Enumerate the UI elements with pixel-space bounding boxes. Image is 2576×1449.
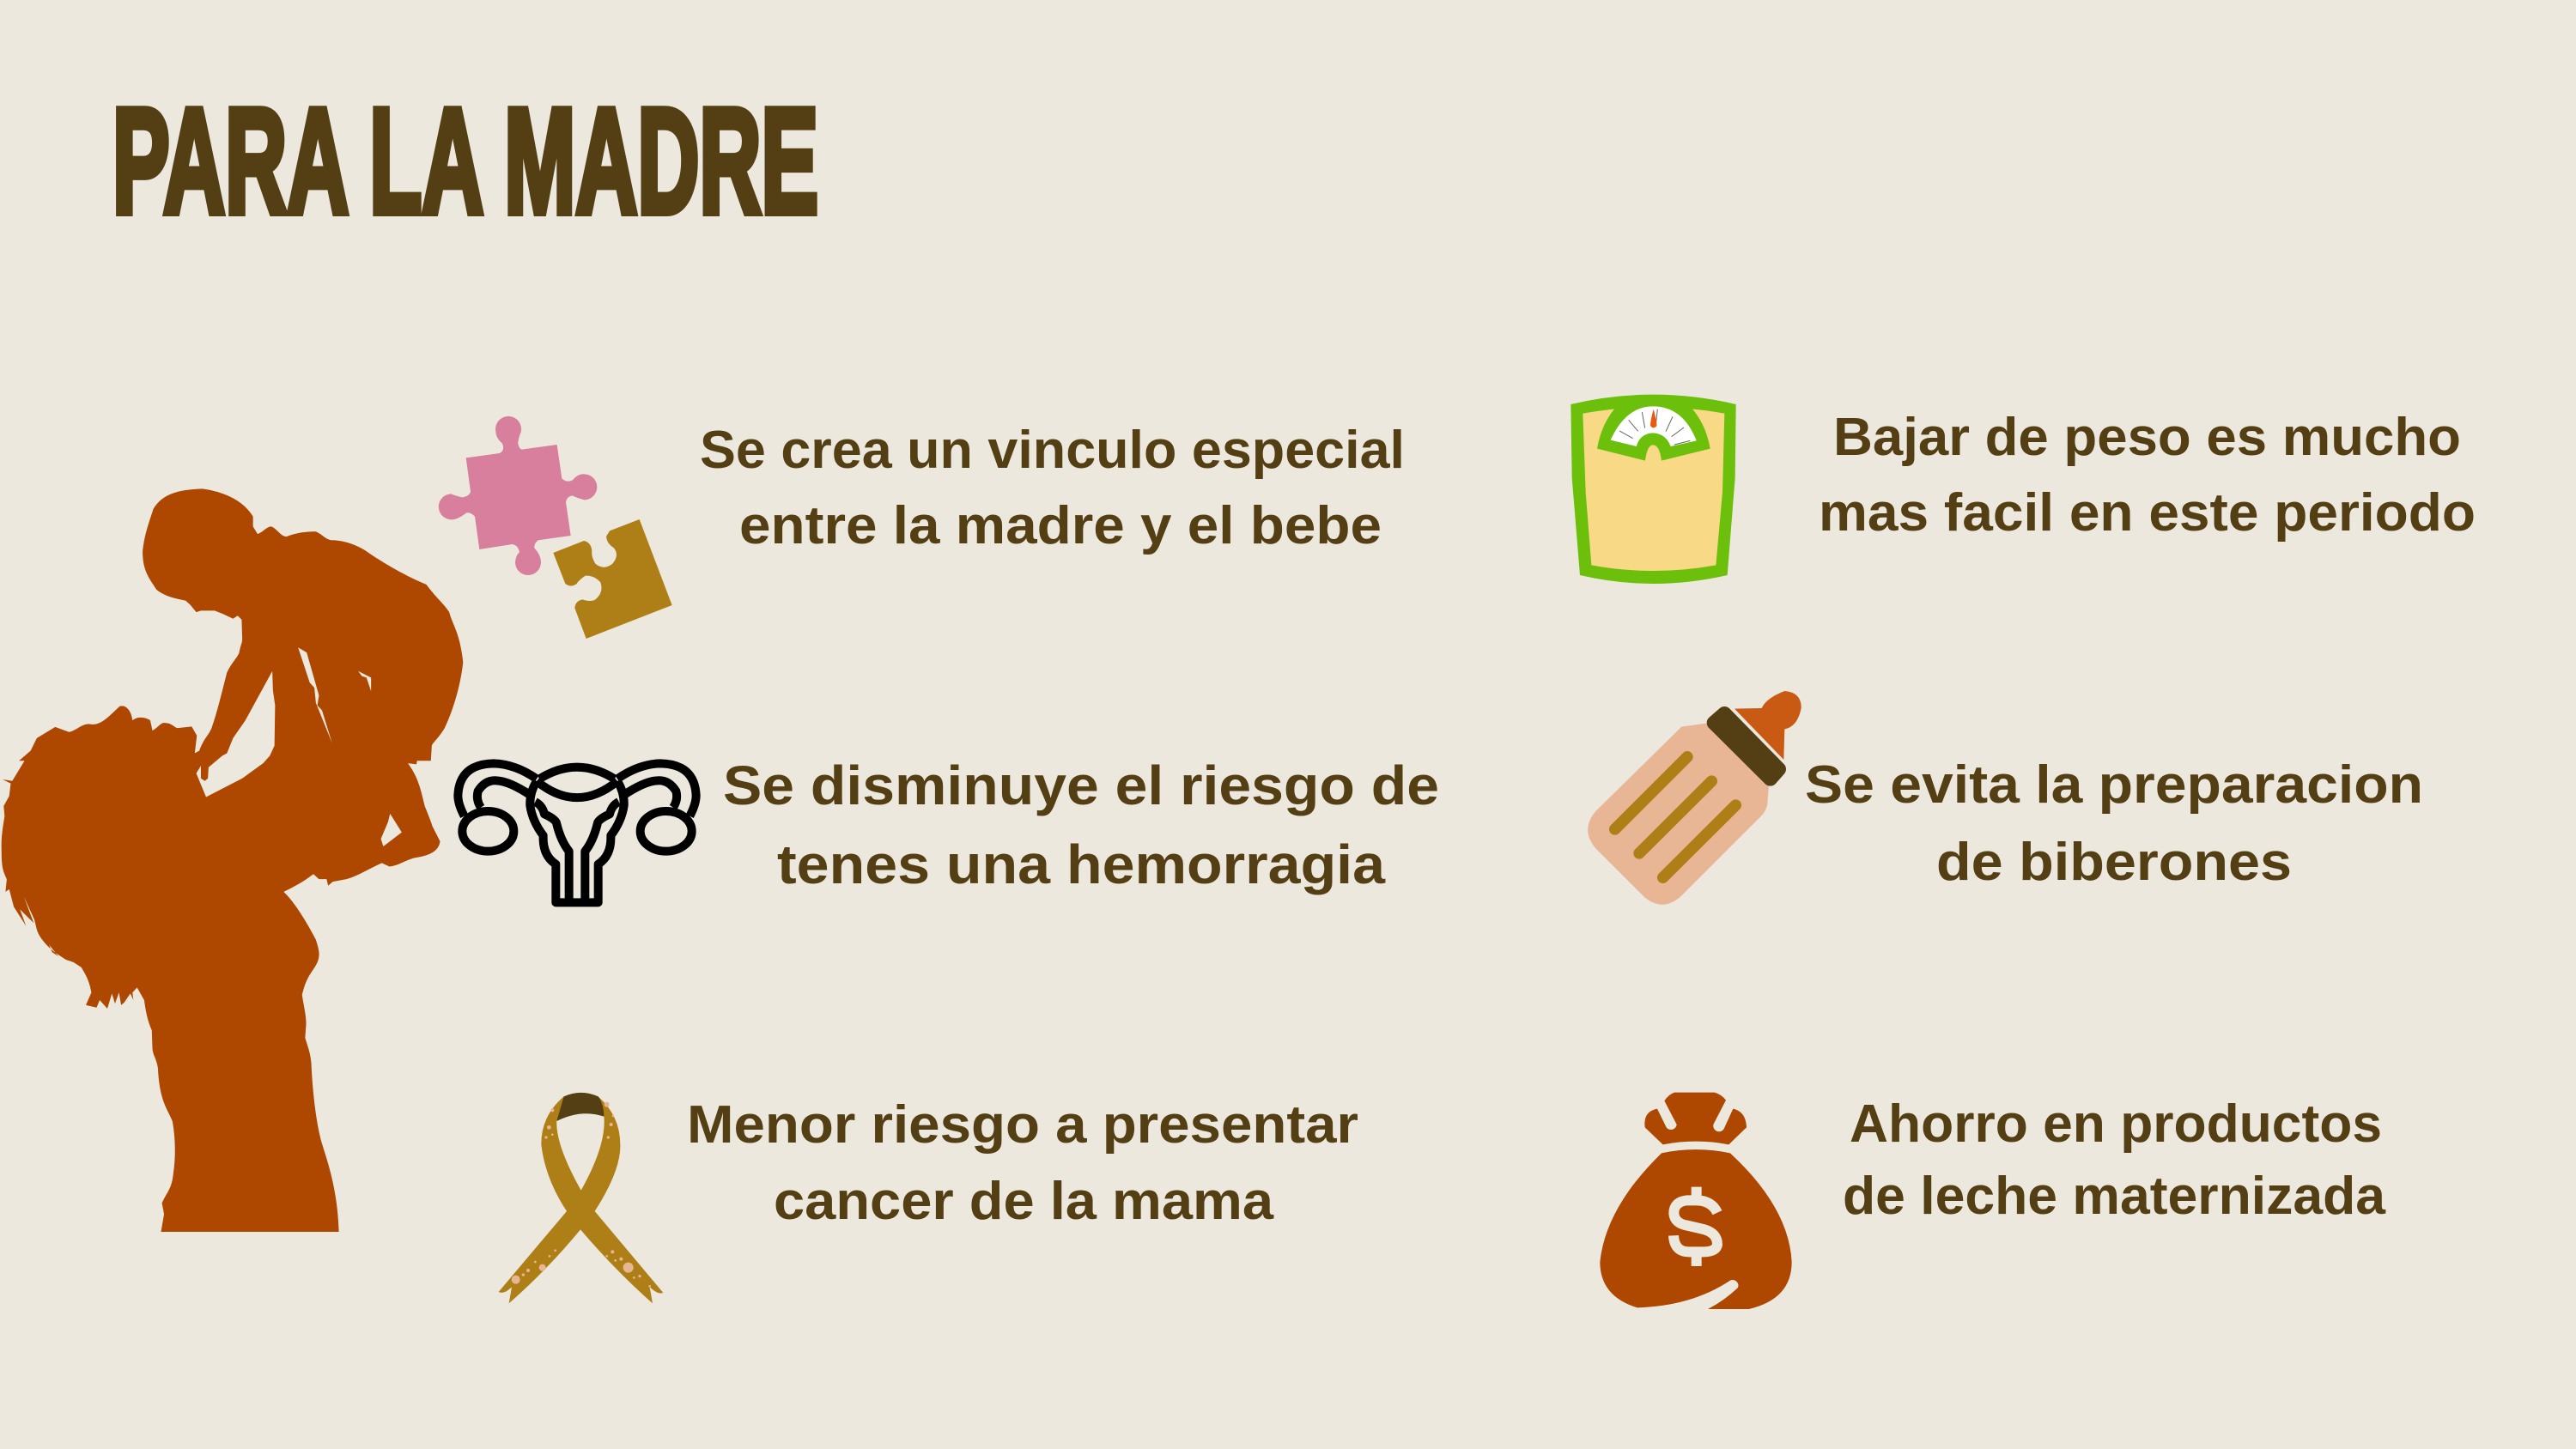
text block: biberones: Se evita la preparacion: [1805, 755, 2423, 815]
text block: ahorro: de leche maternizada: [1843, 1167, 2386, 1226]
title: PARA LA MADRE: [112, 77, 818, 244]
icon: awareness ribbon: [499, 1093, 663, 1303]
text block: ahorro: Ahorro en productos: [1850, 1094, 2382, 1154]
text block: hemorragia: [723, 755, 1439, 895]
text block: bajar de peso: Bajar de peso es mucho: [1833, 408, 2461, 467]
text block: biberones: de biberones: [1936, 833, 2292, 892]
text block: vinculo especial: Se crea un vinculo especial: [700, 421, 1405, 480]
text block: vinculo especial: [700, 421, 1405, 555]
icon: weighing scale: [1571, 395, 1736, 584]
icon: uterus: [458, 763, 696, 902]
text block: hemorragia: tenes una hemorragia: [777, 834, 1385, 895]
text block: biberones: [1805, 755, 2423, 892]
icon: money bag: [1600, 1093, 1792, 1309]
text block: bajar de peso: mas facil en este periodo: [1819, 483, 2476, 543]
text block: cancer de la mama: [687, 1095, 1358, 1231]
text block: vinculo especial: entre la madre y el bebe: [739, 496, 1382, 555]
text block: ahorro: [1843, 1094, 2386, 1226]
icon: puzzle pieces: [439, 416, 672, 639]
text block: hemorragia: Se disminuye el riesgo de: [723, 755, 1439, 816]
text block: cancer de la mama: Menor riesgo a presentar: [687, 1095, 1358, 1155]
text block: cancer de la mama: cancer de la mama: [774, 1172, 1274, 1231]
illustration: mother lifting baby silhouette: [2, 488, 463, 1232]
icon: baby bottle: [1588, 691, 1801, 905]
text block: bajar de peso: [1819, 408, 2476, 543]
